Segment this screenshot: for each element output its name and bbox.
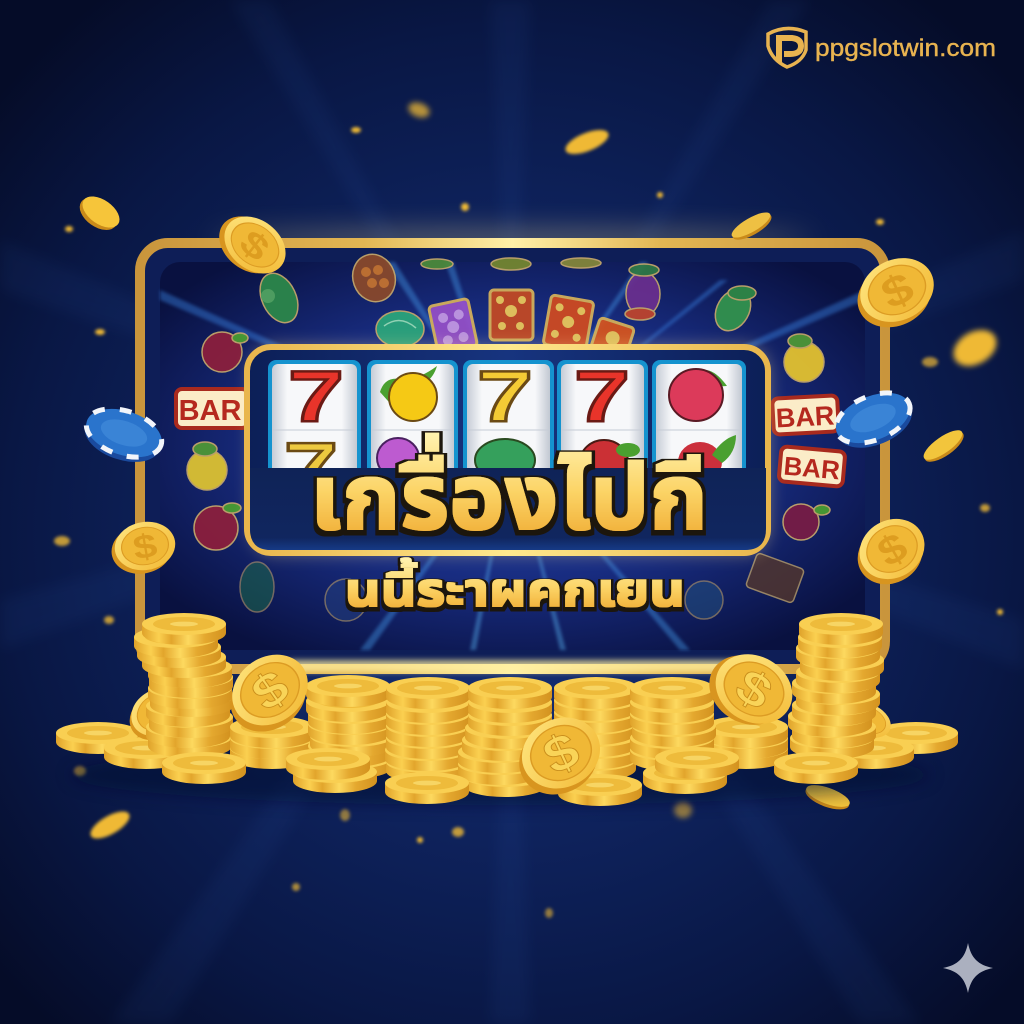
subtitle: นนี้ระาผคกเยน [345, 558, 685, 616]
icon: plum [377, 438, 419, 478]
fruit: green top 2 [491, 258, 531, 270]
reel 2 [367, 360, 458, 480]
icon: green fruit [475, 439, 535, 481]
reel 1: 7 [288, 357, 344, 437]
icon: sparkle [943, 943, 993, 993]
gold coin piles [56, 613, 958, 807]
low stack right [704, 716, 788, 769]
fruit: lemon right [784, 334, 824, 382]
title band [250, 468, 766, 550]
BAR sign left: BAR [179, 395, 241, 427]
frame glow [212, 233, 812, 247]
big coin left [214, 640, 324, 746]
fruit: berry lower right [783, 504, 830, 540]
fruit: grapes [346, 248, 402, 308]
coin: frame top left: $ [232, 222, 277, 269]
fruit: leaf left [253, 267, 305, 329]
reel 3 [463, 357, 554, 481]
small flying coins [74, 190, 968, 814]
coin: frame top left [208, 202, 297, 288]
fruit: green melon [376, 311, 424, 347]
logo text: ppgslotwin.com [815, 35, 996, 62]
faded card lower right [745, 553, 805, 603]
central stack 5 [630, 677, 716, 771]
slot screen [160, 262, 865, 650]
coin: top left small [74, 190, 125, 237]
card: purple [428, 298, 478, 354]
frame bottom glow [290, 660, 740, 672]
fruit: green top 3 [561, 258, 601, 268]
screen rays [160, 262, 865, 650]
coin: left mid [107, 517, 180, 579]
fruit: berry lower left [194, 503, 241, 550]
logo icon: shield [768, 28, 806, 67]
central stack 4 [552, 677, 638, 781]
low stack left [230, 716, 314, 769]
reel 4 [557, 357, 648, 484]
fruit: green top 1 [421, 259, 453, 269]
faded fruit lower right [685, 581, 723, 619]
icon: red fruit with leaf [678, 442, 722, 482]
BAR sign right bottom: BAR [782, 451, 841, 485]
loose coins far left [56, 722, 958, 769]
panel glow [250, 345, 770, 555]
coin: frame top right [845, 246, 946, 339]
card: red 2 [543, 295, 594, 351]
icon: red fruit [580, 440, 628, 484]
shadow under coins [70, 745, 930, 805]
background fruit symbols [187, 248, 830, 621]
faded leaf lower left [240, 562, 274, 612]
big coin right: $ [726, 659, 781, 721]
coin: bottom right small [803, 781, 852, 814]
fruit: green pepper [708, 283, 758, 337]
leaning back coin left [120, 679, 195, 750]
front loose coins [162, 747, 858, 806]
big coin right [697, 638, 805, 741]
central stack 3 [458, 677, 552, 797]
card: red 1 [490, 290, 533, 340]
reel 1: 7 [284, 428, 338, 506]
tall stack right [788, 613, 884, 759]
slot machine panel [247, 347, 768, 553]
icon: lemon [380, 366, 437, 421]
reel 4: 7 [574, 357, 630, 437]
logo [768, 28, 996, 67]
big coin left: $ [242, 660, 299, 722]
reel 3: 7 [477, 357, 533, 437]
coin: right mid: $ [870, 524, 915, 576]
reel 5 [652, 360, 746, 482]
fruit: lemon left [187, 442, 227, 490]
coin: left mid: $ [130, 526, 160, 568]
central stack 1 [306, 675, 394, 779]
poker chip left [79, 400, 168, 471]
poker chip right [829, 383, 919, 458]
BAR sign right top: BAR [775, 400, 835, 434]
coin: frame top right: $ [874, 263, 921, 319]
big coin centre: $ [535, 722, 588, 785]
main golden frame [140, 233, 885, 672]
reel 1 [268, 357, 361, 506]
central stack 2 [385, 677, 470, 783]
card: red 3 [589, 317, 635, 363]
icon: apple [669, 369, 727, 421]
leaning back coin right [836, 694, 897, 746]
tall stack left [134, 613, 234, 758]
coin: top right small [728, 208, 775, 245]
scattered gold particles [54, 100, 1003, 918]
big coin centre [506, 705, 614, 807]
main title: เกรื่องไปกี [310, 433, 708, 549]
faded fruit lower centre [325, 579, 367, 621]
coin: right small [920, 425, 968, 467]
fruit: berry left [202, 332, 248, 372]
coin: right mid [845, 507, 937, 596]
fruit: plum top [625, 264, 660, 320]
